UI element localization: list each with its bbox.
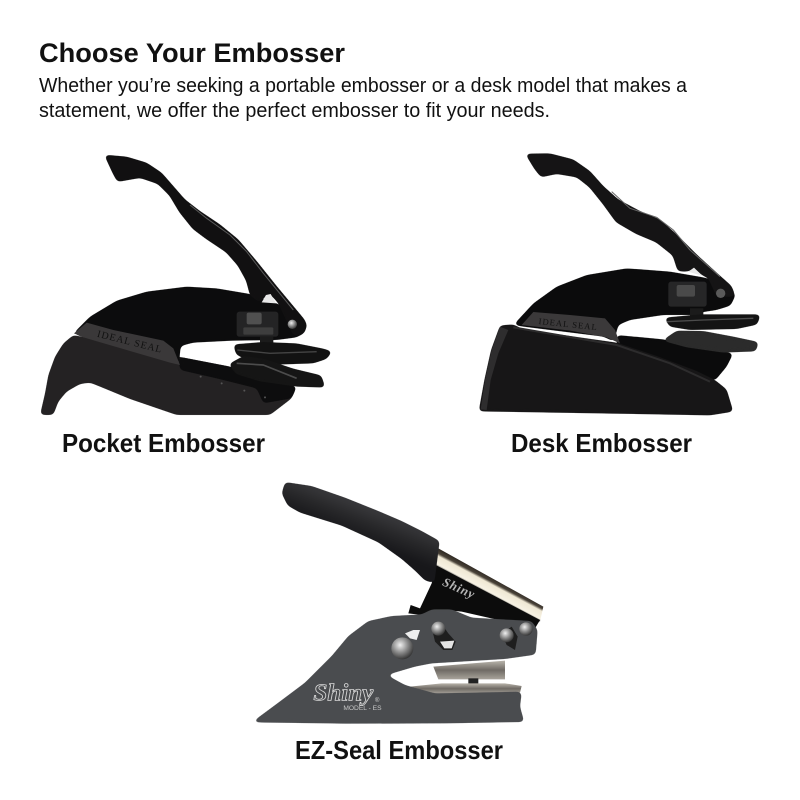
icon: desk embosser (479, 153, 761, 415)
intro text (39, 75, 688, 122)
black plate (408, 565, 540, 628)
lower die plate (410, 683, 522, 694)
icon: ez-seal embosser (252, 482, 543, 724)
upper die ring (237, 350, 317, 353)
pivot lower detail (243, 327, 273, 335)
logo plate (74, 323, 180, 365)
body slot 1 (405, 630, 420, 640)
lower base (40, 335, 297, 415)
label: ez-seal embosser: EZ-Seal Embosser (295, 735, 503, 765)
pivot screw (716, 289, 725, 298)
icon: pocket embosser (40, 155, 332, 415)
inner arm (617, 335, 733, 381)
plate text: IDEAL SEAL (96, 329, 164, 356)
right oval opening (502, 627, 518, 650)
die stem (260, 337, 273, 347)
intro text: Whether you’re seeking a portable embosser or a desk model that makes a (39, 75, 688, 97)
pivot block (668, 282, 707, 307)
upper body (73, 287, 307, 364)
handle highlight (190, 205, 293, 310)
registered mark: ® (375, 697, 380, 704)
plate logo: Shiny (440, 575, 477, 601)
upper body (513, 268, 736, 342)
gray body (252, 609, 538, 724)
rubber grip (282, 482, 440, 583)
lower die (662, 331, 759, 353)
handle cutout (688, 268, 703, 276)
large rivet (391, 637, 413, 659)
handle (525, 153, 736, 297)
pivot detail (247, 313, 262, 324)
body oval light (440, 641, 454, 648)
die highlight (237, 363, 297, 378)
base shoulder shading (178, 357, 297, 403)
die column (468, 678, 478, 684)
lower die (229, 356, 325, 388)
handle highlight (612, 192, 720, 277)
handle cutout (262, 294, 276, 303)
label: desk embosser: Desk Embosser (511, 428, 692, 458)
title: Choose Your Embosser (39, 38, 345, 68)
plate text: IDEAL SEAL (538, 316, 598, 332)
pivot detail (677, 285, 695, 297)
logo plate (522, 312, 620, 343)
steel arm (435, 548, 543, 622)
upper die (233, 342, 332, 365)
body oval opening (432, 624, 456, 650)
rivet 3 (500, 628, 514, 642)
base top edge (513, 327, 710, 382)
rivet 4 (519, 622, 533, 636)
intro text: statement, we offer the perfect embosser to fit your needs. (39, 100, 550, 122)
base front edge (481, 327, 508, 410)
body logo: Shiny (313, 681, 374, 707)
pivot block (237, 312, 278, 337)
base rivets (200, 376, 266, 398)
die stem (690, 308, 703, 317)
desk base (479, 324, 733, 415)
model text: MODEL - ES (343, 705, 382, 712)
label: pocket embosser: Pocket Embosser (62, 428, 265, 458)
handle (104, 155, 307, 336)
upper die plate (433, 661, 505, 679)
upper die (664, 314, 761, 330)
rivet 2 (431, 622, 445, 636)
pivot screw (288, 320, 297, 329)
die ring (667, 318, 753, 322)
